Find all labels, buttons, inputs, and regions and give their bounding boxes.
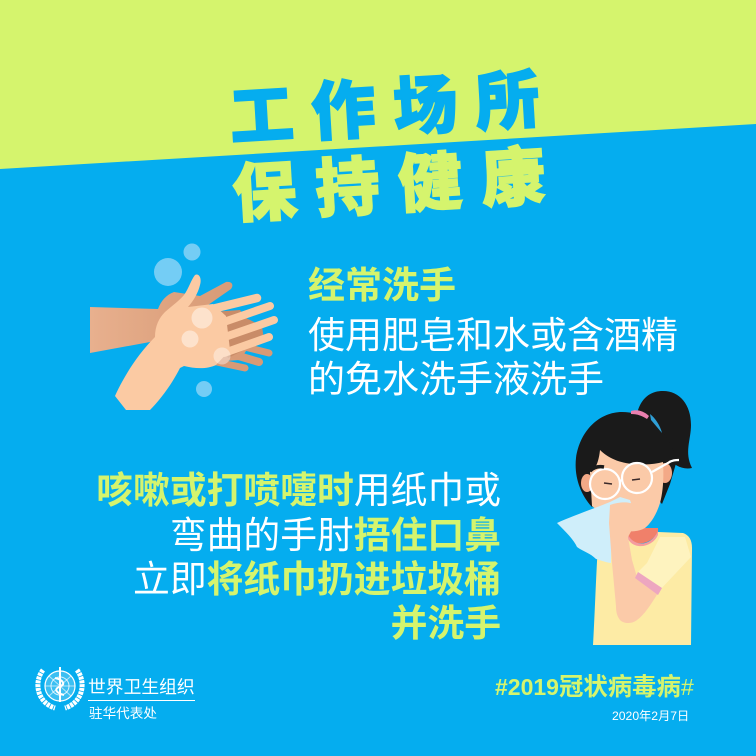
- heading: 经常洗手: [308, 265, 456, 306]
- title: [228, 63, 566, 231]
- line 1: 咳嗽或打喷嚏时用纸巾或: [96, 470, 501, 511]
- back arm and hand: [90, 282, 250, 362]
- text block: wash hands: [308, 265, 678, 400]
- arm: [609, 502, 658, 623]
- organisation name: 世界卫生组织: [88, 677, 195, 697]
- line 2: 的免水洗手液洗手: [308, 359, 604, 400]
- blue gap in ponytail: [650, 414, 662, 433]
- line 3: 立即将纸巾扔进垃圾桶: [133, 559, 501, 600]
- hashtag: #2019冠状病毒病#: [495, 674, 694, 701]
- ponytail: [638, 391, 692, 468]
- hair: [576, 412, 677, 507]
- line 2: 弯曲的手肘捂住口鼻: [170, 515, 501, 556]
- ear right: [658, 463, 672, 483]
- gaps between front fingers: [212, 310, 264, 358]
- eyebrow: [590, 467, 604, 471]
- glasses: [590, 460, 679, 499]
- face: [590, 450, 663, 531]
- line 1: 使用肥皂和水或含酒精: [308, 315, 678, 356]
- ear left: [581, 474, 593, 492]
- sleeve band: [635, 572, 662, 595]
- hair tie: [631, 410, 649, 419]
- neck: [628, 528, 658, 543]
- eyes: [604, 479, 640, 484]
- illustration: woman sneezing into tissue: [557, 391, 692, 645]
- background: lime diagonal band: [0, 0, 756, 169]
- divider: [88, 700, 195, 701]
- line 4: 并洗手: [391, 603, 501, 644]
- front hand and arm: [115, 275, 274, 410]
- logo: WHO: [38, 667, 195, 721]
- title line 2: 保持健康: [231, 139, 566, 231]
- date: 2020年2月7日: [612, 709, 689, 723]
- office name: 驻华代表处: [89, 706, 157, 721]
- collar: [628, 531, 658, 546]
- soap bubbles: [154, 244, 230, 397]
- title line 1: 工作场所: [228, 63, 559, 154]
- light sleeve: [638, 537, 691, 590]
- emblem: [38, 667, 82, 708]
- fingers: [212, 298, 274, 353]
- back fingers: [212, 342, 269, 368]
- icon: washing hands: [90, 244, 274, 410]
- t-shirt: [593, 532, 692, 645]
- text block: cough etiquette: [96, 470, 501, 644]
- tissue: [557, 497, 631, 563]
